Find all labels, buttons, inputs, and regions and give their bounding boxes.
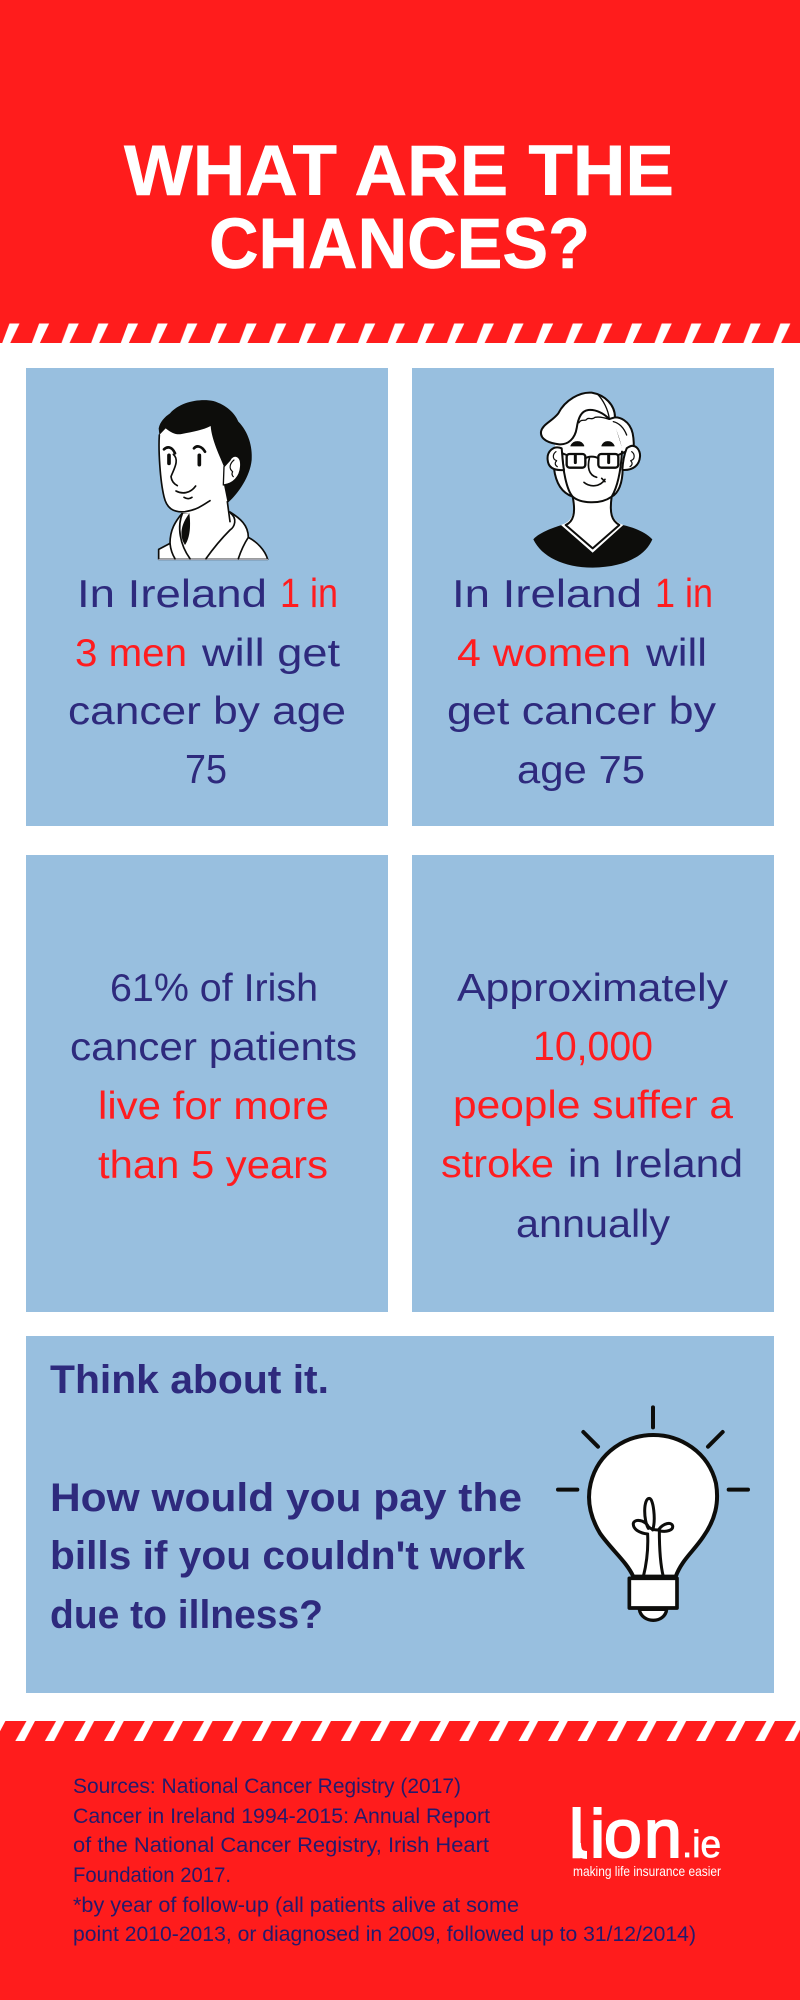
title: WHAT ARE THE — [124, 132, 674, 211]
text: think about it — [50, 1358, 526, 1637]
text: survival statistic: live for more — [98, 1085, 329, 1128]
text: women statistic: In Ireland — [452, 573, 642, 616]
text: stroke statistic: stroke — [441, 1143, 554, 1186]
panel: think about it — [26, 1336, 774, 1693]
text: stroke statistic — [441, 967, 743, 1246]
text: stroke statistic: in Ireland — [568, 1143, 743, 1186]
text: men statistic: will get — [201, 632, 340, 675]
text: sources: of the National Cancer Registry, Irish Heart — [73, 1834, 489, 1857]
text: women statistic: will — [645, 632, 707, 675]
panel: stroke statistic — [412, 855, 774, 1312]
text: survival statistic: cancer patients — [70, 1026, 357, 1069]
text: men statistic — [68, 570, 346, 792]
text: men statistic: cancer by age — [68, 690, 346, 733]
text: think about it: Think about it. — [50, 1358, 329, 1402]
panel: women statistic — [412, 368, 774, 826]
footer banner — [0, 1721, 800, 2000]
text: men statistic: 75 — [185, 746, 227, 792]
text: women statistic: age 75 — [517, 749, 645, 792]
logo: lion.ie — [569, 1796, 721, 1879]
text: sources: point 2010-2013, or diagnosed in 2009, followed up to 31/12/2014) — [73, 1923, 696, 1946]
header banner — [0, 0, 800, 344]
logo: lion.ie: .ie — [682, 1824, 721, 1866]
text: sources: Sources: National Cancer Registry (2017) — [73, 1775, 461, 1798]
panel: survival statistic — [26, 855, 388, 1312]
text: stroke statistic: Approximately — [457, 967, 729, 1010]
text: men statistic: 1 in — [280, 570, 338, 616]
text: survival statistic: 61% of Irish — [110, 967, 318, 1010]
text: men statistic: 3 men — [75, 632, 187, 675]
text: stroke statistic: annually — [516, 1203, 671, 1246]
text: survival statistic: than 5 years — [98, 1144, 328, 1187]
text: sources: *by year of follow-up (all patients alive at some — [73, 1894, 519, 1917]
icon: woman portrait — [533, 393, 652, 568]
title: CHANCES? — [209, 205, 590, 284]
logo: lion.ie: lion — [569, 1796, 682, 1872]
title — [124, 132, 674, 284]
text: survival statistic — [70, 967, 357, 1187]
icon: man portrait — [159, 400, 268, 559]
logo: lion.ie: making life insurance easier — [573, 1863, 721, 1879]
text: think about it: bills if you couldn't work — [50, 1534, 526, 1578]
text: women statistic: 4 women — [457, 632, 631, 675]
text: women statistic — [447, 570, 717, 792]
text: stroke statistic: 10,000 — [533, 1023, 653, 1069]
panel: men statistic — [26, 368, 388, 826]
text: think about it: How would you pay the — [50, 1476, 522, 1520]
text: stroke statistic: people suffer a — [453, 1084, 733, 1127]
text: men statistic: In Ireland — [77, 573, 267, 616]
icon: light bulb — [558, 1407, 748, 1620]
text: sources: Cancer in Ireland 1994-2015: Annual Report — [73, 1805, 490, 1828]
text: sources — [73, 1775, 696, 1946]
text: women statistic: 1 in — [655, 570, 713, 616]
text: sources: Foundation 2017. — [73, 1864, 231, 1887]
text: think about it: due to illness? — [50, 1593, 323, 1637]
text: women statistic: get cancer by — [447, 690, 717, 733]
